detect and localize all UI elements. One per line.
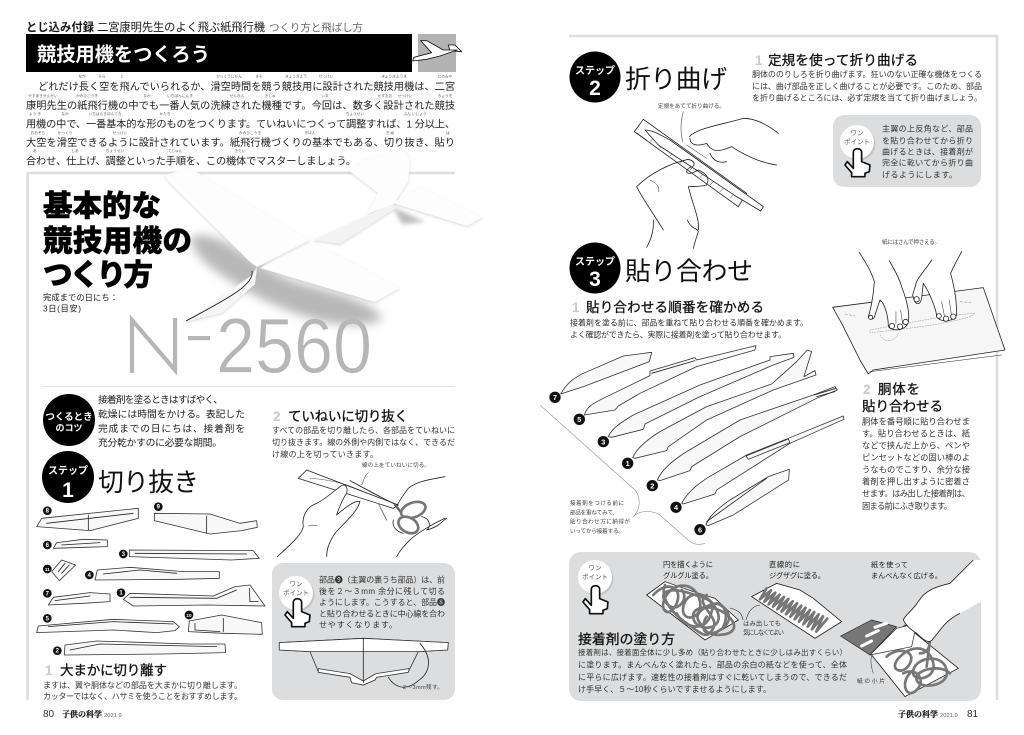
diagram: wing (279, 638, 448, 691)
part 7 (43, 589, 110, 605)
icon: pointing hand badge: ワン (588, 564, 602, 572)
illustration: cutting with scissors: 線の上をていねいに切る。 (362, 461, 430, 469)
heading: basic competition plane: つくり方 (43, 259, 153, 292)
illustration: cutting with scissors (277, 461, 447, 557)
completion time note: 3日(目安) (43, 304, 81, 314)
part 5: 5 (577, 415, 581, 424)
text: one point 1: 後を２～３mm 余分に残して切る (319, 586, 445, 596)
intro text: 用機の中で、一番基本的な形のものをつくります。ていねいにつくって調整すれば、1 分以上、 (26, 118, 455, 130)
illustration: pressing fuselage through paper (833, 238, 1005, 374)
text: how to apply glue: に塗ります。まんべんなく塗れたら、部品の余白の紙などを使って、全体 (578, 660, 847, 670)
header line: 二宮康明先生のよく飛ぶ紙飛行機 (97, 20, 265, 34)
intro text: 康明先生の紙飛行機の中でも一番人気の洗練された機種です。今回は、数多く設計された競技 (26, 99, 455, 112)
text: one point 1: と貼り合わせるときに中心線を合わ (319, 608, 445, 618)
heading: check order: 1 (572, 300, 580, 315)
model number N-2560: 2560 (216, 302, 372, 390)
intro text: そら (98, 74, 106, 78)
footer: right page (898, 709, 979, 720)
text: rough cut: ますは、翼や胴体などの部品を大まかに切り離します。 (43, 680, 242, 690)
text: how to apply glue (578, 647, 847, 694)
icon: pointing hand badge (279, 576, 314, 627)
part 5 (574, 346, 756, 425)
intro text: きょうぎよう (285, 74, 307, 78)
intro text: かっくう (58, 130, 72, 135)
text: check order: 接着剤を塗る前に、部品を重ねて貼り合わせる順番を確かめます。 (570, 318, 808, 328)
illustration: pressing fuselage through paper: 紙にはさんで押さえる。 (882, 238, 940, 246)
heading: basic competition plane: 基本的な (43, 190, 161, 223)
intro text: かっくうじかん (216, 74, 242, 78)
panel: one point 1 (272, 563, 455, 700)
part 1 (117, 585, 265, 606)
text: glue the fuselage: せます。はみ出した接着剤は、 (862, 488, 970, 498)
diagram: wing: 2～3mm残す。 (403, 683, 443, 691)
text: how to apply glue: に平らに広げます。速乾性の接着剤はすぐに乾いてしまうので、できるだ (578, 672, 847, 682)
plane shadow (190, 235, 382, 325)
tips text: 完成までの日にちは、接着剤を (98, 422, 245, 435)
callout leader (540, 405, 705, 544)
intro text: 合わせ、仕上げ、調整といった手順を、この機体でマスターしましょう。 (26, 154, 356, 168)
part 9 (154, 502, 257, 534)
part 4: 4 (88, 573, 92, 579)
tips text: 充分乾かすのに必要な期間。 (98, 436, 222, 449)
text: fold with ruler: には、曲げ部品を正しく曲げることが必要です。このため、部品 (752, 81, 982, 91)
part 4: 4 (674, 503, 679, 512)
text: one point 2: 主翼の上反角など、部品 (882, 124, 973, 134)
icon: pointing hand badge: ワン (850, 129, 864, 137)
title banner: 競技用機をつくろう (37, 44, 210, 66)
part 6 (43, 539, 107, 549)
intro text: いま (321, 93, 329, 98)
part 3: 3 (601, 437, 605, 446)
part 6: 6 (46, 543, 50, 549)
text: fold with ruler: を折り曲げるところには、必ず定規を当てて折り曲げましょう。 (752, 92, 982, 102)
intro text: せっけい (113, 130, 128, 135)
footer: left page: 子供の科学 (62, 709, 102, 719)
intro text: ぶん いじょう (403, 111, 427, 116)
tail shadow (393, 207, 425, 224)
completion time note: 完成までの日にち： (43, 292, 118, 302)
badge: step 1: ステップ (48, 465, 88, 477)
part 10: 10 (186, 613, 192, 618)
part 6: 6 (698, 525, 702, 534)
intro text: よう き (29, 111, 41, 116)
part 10 (185, 611, 262, 634)
part 7 (549, 352, 652, 403)
text: one point 2 (882, 124, 973, 180)
text: one point 2: 曲げるときは、接着剤が (882, 146, 973, 156)
heading: step 3: 貼り合わせ (625, 257, 753, 286)
intro text: おおぞら (31, 130, 46, 135)
badge: step 1: 1 (62, 479, 74, 502)
badge: step 2: 2 (589, 77, 601, 100)
text: rough cut: カッターではなく、ハサミを使うことをおすすめします。 (43, 691, 242, 701)
tips text: 接着剤を塗るときはすばやく、 (98, 393, 223, 406)
part 8 (37, 506, 138, 531)
text: glue the fuselage: うなものでこすり、余分な接 (862, 464, 970, 474)
heading: rough cut: 1 (45, 663, 53, 678)
badge: tips: つくるとき (45, 412, 93, 423)
tips text: 乾燥には時間をかける。表記した (98, 408, 245, 420)
intro text: なが (78, 74, 86, 78)
intro text: き ぬ (386, 130, 395, 135)
text: how to apply glue: け手早く、５～10秒くらいですませるようにします。 (578, 684, 771, 694)
heading: step 2: 折り曲げ (625, 65, 727, 94)
intro text: きたい (234, 148, 246, 153)
intro text: にのみや (438, 74, 453, 78)
intro text: やすあきせんせい (28, 93, 58, 98)
part 3 (119, 550, 259, 560)
text: rough cut (43, 680, 242, 701)
part 3: 3 (122, 552, 126, 558)
text: cut carefully: すべての部品を切り離したら、各部品をていねいに (272, 425, 455, 435)
callout: check fit before gluing: 接着剤をつける前に (570, 499, 624, 507)
icon: plane badge (413, 34, 462, 72)
intro text: せっけい (398, 93, 413, 98)
callout: overflow is ok (730, 605, 784, 636)
part 2: 2 (650, 481, 654, 490)
badge: tips (43, 394, 95, 446)
intro text: かみひこうき (76, 93, 98, 98)
intro text: は (446, 130, 450, 135)
callout: check fit before gluing: 部品を重ねてみて、 (570, 508, 618, 516)
callout: check fit before gluing: いってから接着する。 (570, 527, 624, 535)
icon: pointing hand badge: ワン (290, 580, 302, 588)
intro text: 大空を滑空できるように設計されています。紙飛行機づくりの基本でもある、切り抜き、貼り (26, 136, 455, 149)
heading: cut carefully: ていねいに切り抜く (288, 409, 408, 424)
heading: basic competition plane (43, 190, 192, 292)
text: check order: よく確認ができたら、実際に接着剤を塗って貼り合わせます。 (570, 330, 786, 340)
intro text: きょうぎようき (381, 74, 407, 78)
footer: right page: 2021.9 (940, 713, 958, 719)
heading: rough cut: 大まかに切り離す (60, 663, 167, 678)
badge: step 3: ステップ (575, 256, 615, 268)
tips text (98, 393, 245, 449)
text: glue the fuselage: 胴体を番号順に貼り合わせま (862, 416, 970, 426)
part 1: 1 (626, 459, 630, 468)
model number N-2560 (132, 302, 372, 390)
footer: left page (43, 709, 122, 720)
badge: step 2: ステップ (575, 65, 615, 77)
icon: pointing hand badge: ポイント (582, 573, 608, 581)
divider (43, 386, 455, 388)
intro text: いちばんにんき (167, 93, 193, 98)
text: fold with ruler: 胴体ののりしろを折り曲げます。狂いのない正確な機体をつくる (752, 69, 982, 79)
intro text: せっけい (319, 74, 334, 78)
intro text (26, 74, 455, 168)
part 3 (598, 353, 794, 447)
heading: step 1: 切り抜き (98, 468, 199, 497)
panel: how to apply glue (569, 552, 981, 701)
intro text: きしゅ (264, 93, 276, 98)
badge: step 3: 3 (589, 268, 601, 291)
part 4 (670, 416, 844, 513)
header line: とじ込み付録 (26, 20, 95, 34)
callout: check fit before gluing (570, 499, 630, 535)
intro text: きほん (304, 130, 316, 135)
part 1 (622, 350, 816, 469)
intro text: かたち (159, 111, 171, 116)
frame: left page (28, 173, 455, 700)
part 4 (85, 567, 219, 580)
method labels: グルグル塗る。 (663, 571, 713, 580)
illustration: folding with ruler: 定規をあてて折り曲げる。 (658, 102, 725, 110)
part 6 (694, 469, 789, 535)
badge: step 1 (42, 451, 94, 503)
callout: check fit before gluing: 貼り合わせ方に納得が (570, 518, 630, 526)
text: cut carefully: け線の上を切っていきます。 (272, 449, 378, 459)
header line (26, 20, 363, 34)
text: how to apply glue: 接着剤は、接着面全体に少し多め（貼り合わせたときに少しはみ出すくらい） (578, 647, 847, 657)
icon: pointing hand badge (840, 125, 876, 177)
heading: glue the fuselage (862, 382, 943, 414)
heading: how to apply glue: 接着剤の塗り方 (578, 631, 675, 647)
illustration: spreading with paper (841, 560, 981, 697)
heading: glue the fuselage: 2 (863, 382, 871, 397)
intro text: どれだけ長く空を飛んでいられるか、滑空時間を競う競技用に設計された競技用機は、二宮 (38, 80, 455, 93)
intro text: かずおお (378, 93, 393, 98)
text: one point 1 (319, 574, 445, 630)
text: one point 1: 部品❾（主翼の裏うち部品）は、前 (319, 574, 445, 584)
footer: right page: 81 (967, 709, 979, 720)
part 7: 7 (46, 591, 50, 597)
icon: pointing hand badge: ポイント (844, 138, 870, 146)
part 2: 2 (56, 649, 60, 655)
panel: one point 2 (833, 115, 981, 187)
intro text: きそ (255, 74, 263, 78)
icon: pointing hand badge (578, 560, 614, 614)
callout: overflow is ok: はみ出しても (743, 618, 781, 628)
intro text: と (120, 74, 124, 78)
method labels (663, 560, 942, 580)
heading: fold with ruler: 定規を使って折り曲げる (768, 52, 918, 68)
part 5 (37, 614, 179, 633)
title banner (26, 34, 412, 72)
badge: step 3 (570, 242, 620, 294)
text: one point 1: せやすくなります。 (319, 620, 397, 630)
heading: cut carefully: 2 (273, 409, 281, 424)
heading: fold with ruler: 1 (755, 53, 763, 68)
part 7: 7 (553, 393, 557, 402)
text: glue the fuselage: す。貼り合わせるときは、紙 (862, 428, 971, 438)
hero plane photo (165, 150, 483, 325)
footer: right page: 子供の科学 (898, 709, 938, 719)
text: glue the fuselage: ピンセットなどの固い棒のよ (862, 452, 970, 462)
heading: check order: 貼り合わせる順番を確かめる (586, 300, 764, 315)
part 2 (53, 641, 226, 655)
illustration: folding with ruler (634, 102, 778, 248)
part 5: 5 (46, 616, 50, 622)
method labels: ジグザグに塗る。 (769, 571, 825, 580)
method labels: まんべんなく広げる。 (871, 571, 942, 580)
footer: left page: 80 (43, 709, 55, 720)
heading: basic competition plane: 競技用機の (43, 225, 192, 258)
part 1: 1 (119, 591, 123, 597)
text: one point 2: げるようにします。 (882, 170, 957, 180)
intro text: しあ (71, 148, 79, 153)
plane body (165, 150, 483, 322)
intro text: ちょうせい (106, 148, 125, 153)
completion time note (43, 292, 118, 314)
footer: left page: 2021.9 (104, 713, 122, 719)
badge: step 2 (570, 52, 620, 102)
text: glue the fuselage (862, 416, 971, 511)
text: one point 1: ようにします。こうすると、部品❽ (319, 598, 445, 607)
intro text: いちばんきほんてき (89, 111, 122, 116)
part 2 (647, 387, 837, 491)
method labels: 円を描くように (663, 560, 713, 569)
intro text: なか (143, 93, 151, 98)
text: glue the fuselage: 着剤を押し出すように密着さ (862, 476, 970, 486)
text: cut carefully (272, 425, 455, 459)
intro text: きょうぎ (438, 93, 453, 98)
text: glue the fuselage: 固まる前にふき取ります。 (862, 501, 952, 511)
text: cut carefully: 切り抜きます。線の外側や内側ではなく、できるだ (272, 437, 455, 447)
heading: glue the fuselage: 貼り合わせる (862, 399, 943, 414)
illustration: zigzag glue strokes (752, 583, 842, 638)
text: check order (570, 318, 808, 340)
intro text: なか (61, 111, 69, 116)
text: one point 2: を貼り合わせてから折り (882, 136, 973, 146)
text: glue the fuselage: などで挟んだ上から、ペンや (862, 440, 970, 450)
text: one point 2: 完全に乾いてから折り曲 (882, 158, 973, 168)
part 11 (43, 560, 76, 581)
intro text: てじゅん (168, 148, 183, 153)
badge: tips: のコツ (55, 423, 83, 433)
parts layout: step 3 (540, 346, 844, 544)
intro text: かみひこうき (239, 130, 261, 135)
callout: overflow is ok: 気にしなくてよい (743, 628, 784, 636)
intro text: ちょうせい (346, 111, 365, 116)
part 9: 9 (157, 505, 161, 511)
part 8: 8 (46, 509, 50, 515)
frame: right page (569, 36, 997, 700)
method labels: 直線的に (769, 560, 800, 569)
header line: つくり方と飛ばし方 (269, 21, 363, 34)
part 11: 11 (45, 567, 50, 572)
method labels: 紙を使って (871, 560, 908, 569)
icon: pointing hand badge: ポイント (283, 589, 309, 597)
text: fold with ruler (752, 69, 982, 102)
intro text: あ (33, 148, 37, 153)
intro text: せんれん (230, 93, 245, 98)
label: scrap of paper: 紙の小片 (857, 677, 885, 685)
parts layout: step 1 (37, 502, 265, 655)
heading: glue the fuselage: 胴体を (878, 382, 920, 397)
illustration: circular glue strokes (647, 582, 738, 640)
